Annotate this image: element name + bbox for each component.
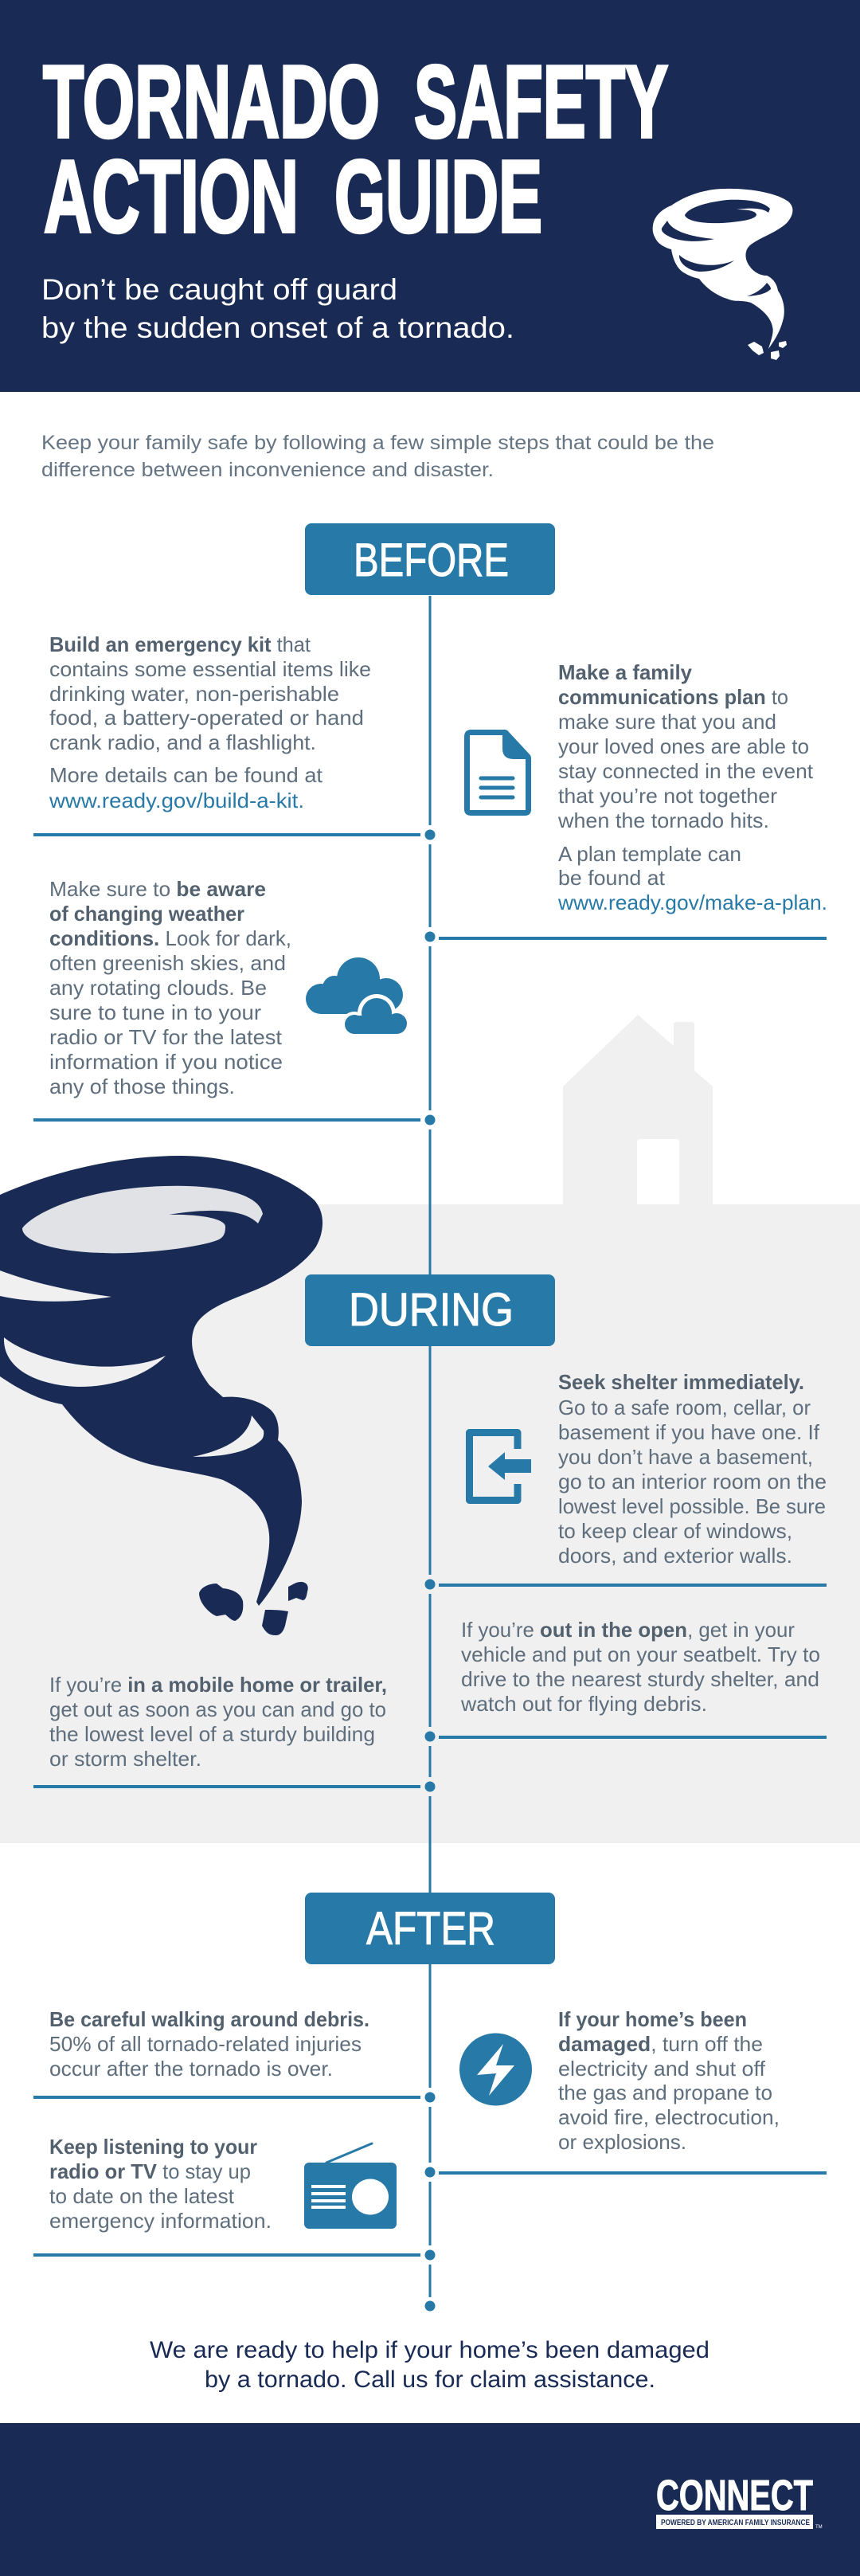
text: home damaged: electricity and shut off bbox=[558, 2057, 766, 2081]
text: keep listening: to date on the latest bbox=[49, 2184, 235, 2208]
text: seek shelter: Seek shelter immediately. bbox=[558, 1370, 804, 1394]
text: emergency kit: crank radio, and a flashlight. bbox=[49, 730, 316, 754]
panel: during bbox=[49, 1274, 827, 1771]
big tornado bbox=[0, 1156, 322, 1635]
text: debris bbox=[49, 2007, 369, 2081]
text: seek shelter: you don’t have a basement, bbox=[558, 1445, 813, 1469]
icon: white tornado bbox=[653, 189, 792, 360]
text: home damaged: or explosions. bbox=[558, 2130, 686, 2154]
text: seek shelter: to keep clear of windows, bbox=[558, 1519, 792, 1543]
text: weather conditions bbox=[49, 877, 291, 1098]
text: debris: occur after the tornado is over. bbox=[49, 2057, 333, 2081]
heading: after bbox=[305, 1893, 555, 1964]
text: debris: Be careful walking around debris. bbox=[49, 2007, 369, 2031]
text: home damaged: damaged, turn off the bbox=[558, 2032, 763, 2056]
text: keep listening: emergency information. bbox=[49, 2209, 272, 2233]
text: keep listening: Keep listening to your bbox=[49, 2135, 257, 2159]
text: weather conditions: of changing weather bbox=[49, 902, 244, 926]
text: keep listening: radio or TV to stay up bbox=[49, 2159, 251, 2183]
text: communications plan: make sure that you and bbox=[558, 710, 776, 734]
text: communications plan: when the tornado hits. bbox=[557, 808, 769, 832]
panel: before bbox=[49, 523, 827, 1098]
text: weather conditions: sure to tune in to your bbox=[49, 1000, 261, 1024]
text: mobile home: get out as soon as you can and go to bbox=[49, 1697, 386, 1721]
text: seek shelter: go to an interior room on the bbox=[558, 1470, 827, 1494]
text: weather conditions: radio or TV for the latest bbox=[49, 1025, 283, 1049]
text: communications plan: Make a family bbox=[558, 660, 693, 684]
title bbox=[43, 45, 668, 254]
closing message bbox=[150, 2337, 710, 2393]
text: debris: 50% of all tornado-related injuries bbox=[49, 2032, 362, 2056]
icon: exit arrow bbox=[470, 1432, 531, 1501]
text: weather conditions: often greenish skies, and bbox=[49, 951, 286, 975]
text: seek shelter: doors, and exterior walls. bbox=[558, 1544, 792, 1568]
panel: footer bbox=[0, 2423, 860, 2576]
text: weather conditions: any of those things. bbox=[49, 1075, 235, 1098]
text: emergency kit: More details can be found at bbox=[49, 763, 323, 787]
text: mobile home: the lowest level of a sturdy building bbox=[49, 1722, 375, 1746]
subtitle: by the sudden onset of a tornado. bbox=[41, 311, 514, 344]
logo: connect: POWERED BY AMERICAN FAMILY INSURANCE bbox=[661, 2519, 810, 2527]
closing message: by a tornado. Call us for claim assistance. bbox=[205, 2367, 655, 2393]
subtitle: Don’t be caught off guard bbox=[41, 273, 397, 306]
text: seek shelter: lowest level possible. Be sure bbox=[558, 1494, 826, 1518]
title: TORNADO bbox=[43, 45, 380, 159]
subtitle bbox=[41, 273, 514, 344]
text: mobile home: or storm shelter. bbox=[49, 1747, 201, 1771]
closing message: We are ready to help if your home’s been damaged bbox=[150, 2337, 710, 2363]
text: emergency kit: www.ready.gov/build-a-kit. bbox=[49, 789, 304, 812]
icon: document bbox=[464, 730, 531, 816]
heading: before: BEFORE bbox=[354, 534, 509, 586]
heading: after: AFTER bbox=[366, 1903, 495, 1955]
text: emergency kit: food, a battery-operated or hand bbox=[49, 706, 364, 730]
panel: during background bbox=[0, 1204, 860, 1843]
text: home damaged: the gas and propane to bbox=[558, 2081, 772, 2104]
text: communications plan: that you’re not together bbox=[558, 784, 777, 808]
text: communications plan: www.ready.gov/make-a-plan. bbox=[557, 891, 827, 914]
text: communications plan bbox=[557, 660, 827, 914]
heading: during bbox=[305, 1274, 555, 1346]
text: weather conditions: any rotating clouds. Be bbox=[49, 976, 267, 1000]
text: emergency kit: drinking water, non-perishable bbox=[49, 682, 339, 706]
debris bbox=[199, 1582, 308, 1635]
icon: clouds bbox=[306, 957, 411, 1039]
text: seek shelter: basement if you have one. If bbox=[558, 1420, 820, 1444]
text: seek shelter bbox=[558, 1370, 827, 1568]
panel: header bbox=[0, 0, 860, 392]
text: out in the open: drive to the nearest sturdy shelter, and bbox=[461, 1667, 819, 1691]
text: weather conditions: conditions. Look for dark, bbox=[49, 926, 291, 950]
logo: connect bbox=[656, 2472, 823, 2530]
timeline bbox=[33, 596, 827, 2312]
text: out in the open: If you’re out in the open, get in your bbox=[461, 1618, 795, 1642]
intro text bbox=[41, 432, 714, 481]
icon: lightning bolt bbox=[459, 2033, 532, 2106]
text: weather conditions: information if you notice bbox=[49, 1050, 283, 1074]
text: emergency kit: Build an emergency kit that bbox=[49, 632, 311, 656]
title: ACTION bbox=[44, 139, 299, 254]
house silhouette bbox=[563, 1015, 713, 1204]
text: home damaged: If your home’s been bbox=[558, 2007, 747, 2031]
text: out in the open: watch out for flying debris. bbox=[460, 1692, 707, 1716]
text: seek shelter: Go to a safe room, cellar, or bbox=[558, 1396, 811, 1419]
heading: during: DURING bbox=[349, 1284, 514, 1336]
text: communications plan: stay connected in the event bbox=[558, 759, 814, 783]
text: weather conditions: Make sure to be aware bbox=[49, 877, 266, 901]
text: mobile home bbox=[49, 1673, 387, 1771]
text: emergency kit: contains some essential items like bbox=[49, 657, 371, 681]
text: communications plan: communications plan to bbox=[558, 685, 788, 709]
text: communications plan: A plan template can bbox=[558, 842, 741, 866]
text: out in the open bbox=[460, 1618, 820, 1716]
text: home damaged: avoid fire, electrocution, bbox=[558, 2105, 780, 2129]
intro text: difference between inconvenience and disaster. bbox=[41, 459, 494, 481]
text: out in the open: vehicle and put on your seatbelt. Try to bbox=[461, 1642, 820, 1666]
intro text: Keep your family safe by following a few simple steps that could be the bbox=[41, 432, 714, 454]
logo: connect: TM bbox=[815, 2525, 823, 2530]
text: communications plan: your loved ones are able to bbox=[558, 734, 809, 758]
heading: before bbox=[305, 523, 555, 595]
text: communications plan: be found at bbox=[558, 866, 666, 890]
icon: radio bbox=[304, 2143, 397, 2229]
panel: after bbox=[49, 1893, 780, 2233]
text: emergency kit bbox=[49, 632, 371, 812]
text: keep listening bbox=[49, 2135, 272, 2233]
text: home damaged bbox=[558, 2007, 780, 2154]
title: GUIDE bbox=[334, 139, 542, 254]
title: SAFETY bbox=[414, 45, 668, 159]
text: mobile home: If you’re in a mobile home or trailer, bbox=[49, 1673, 387, 1697]
